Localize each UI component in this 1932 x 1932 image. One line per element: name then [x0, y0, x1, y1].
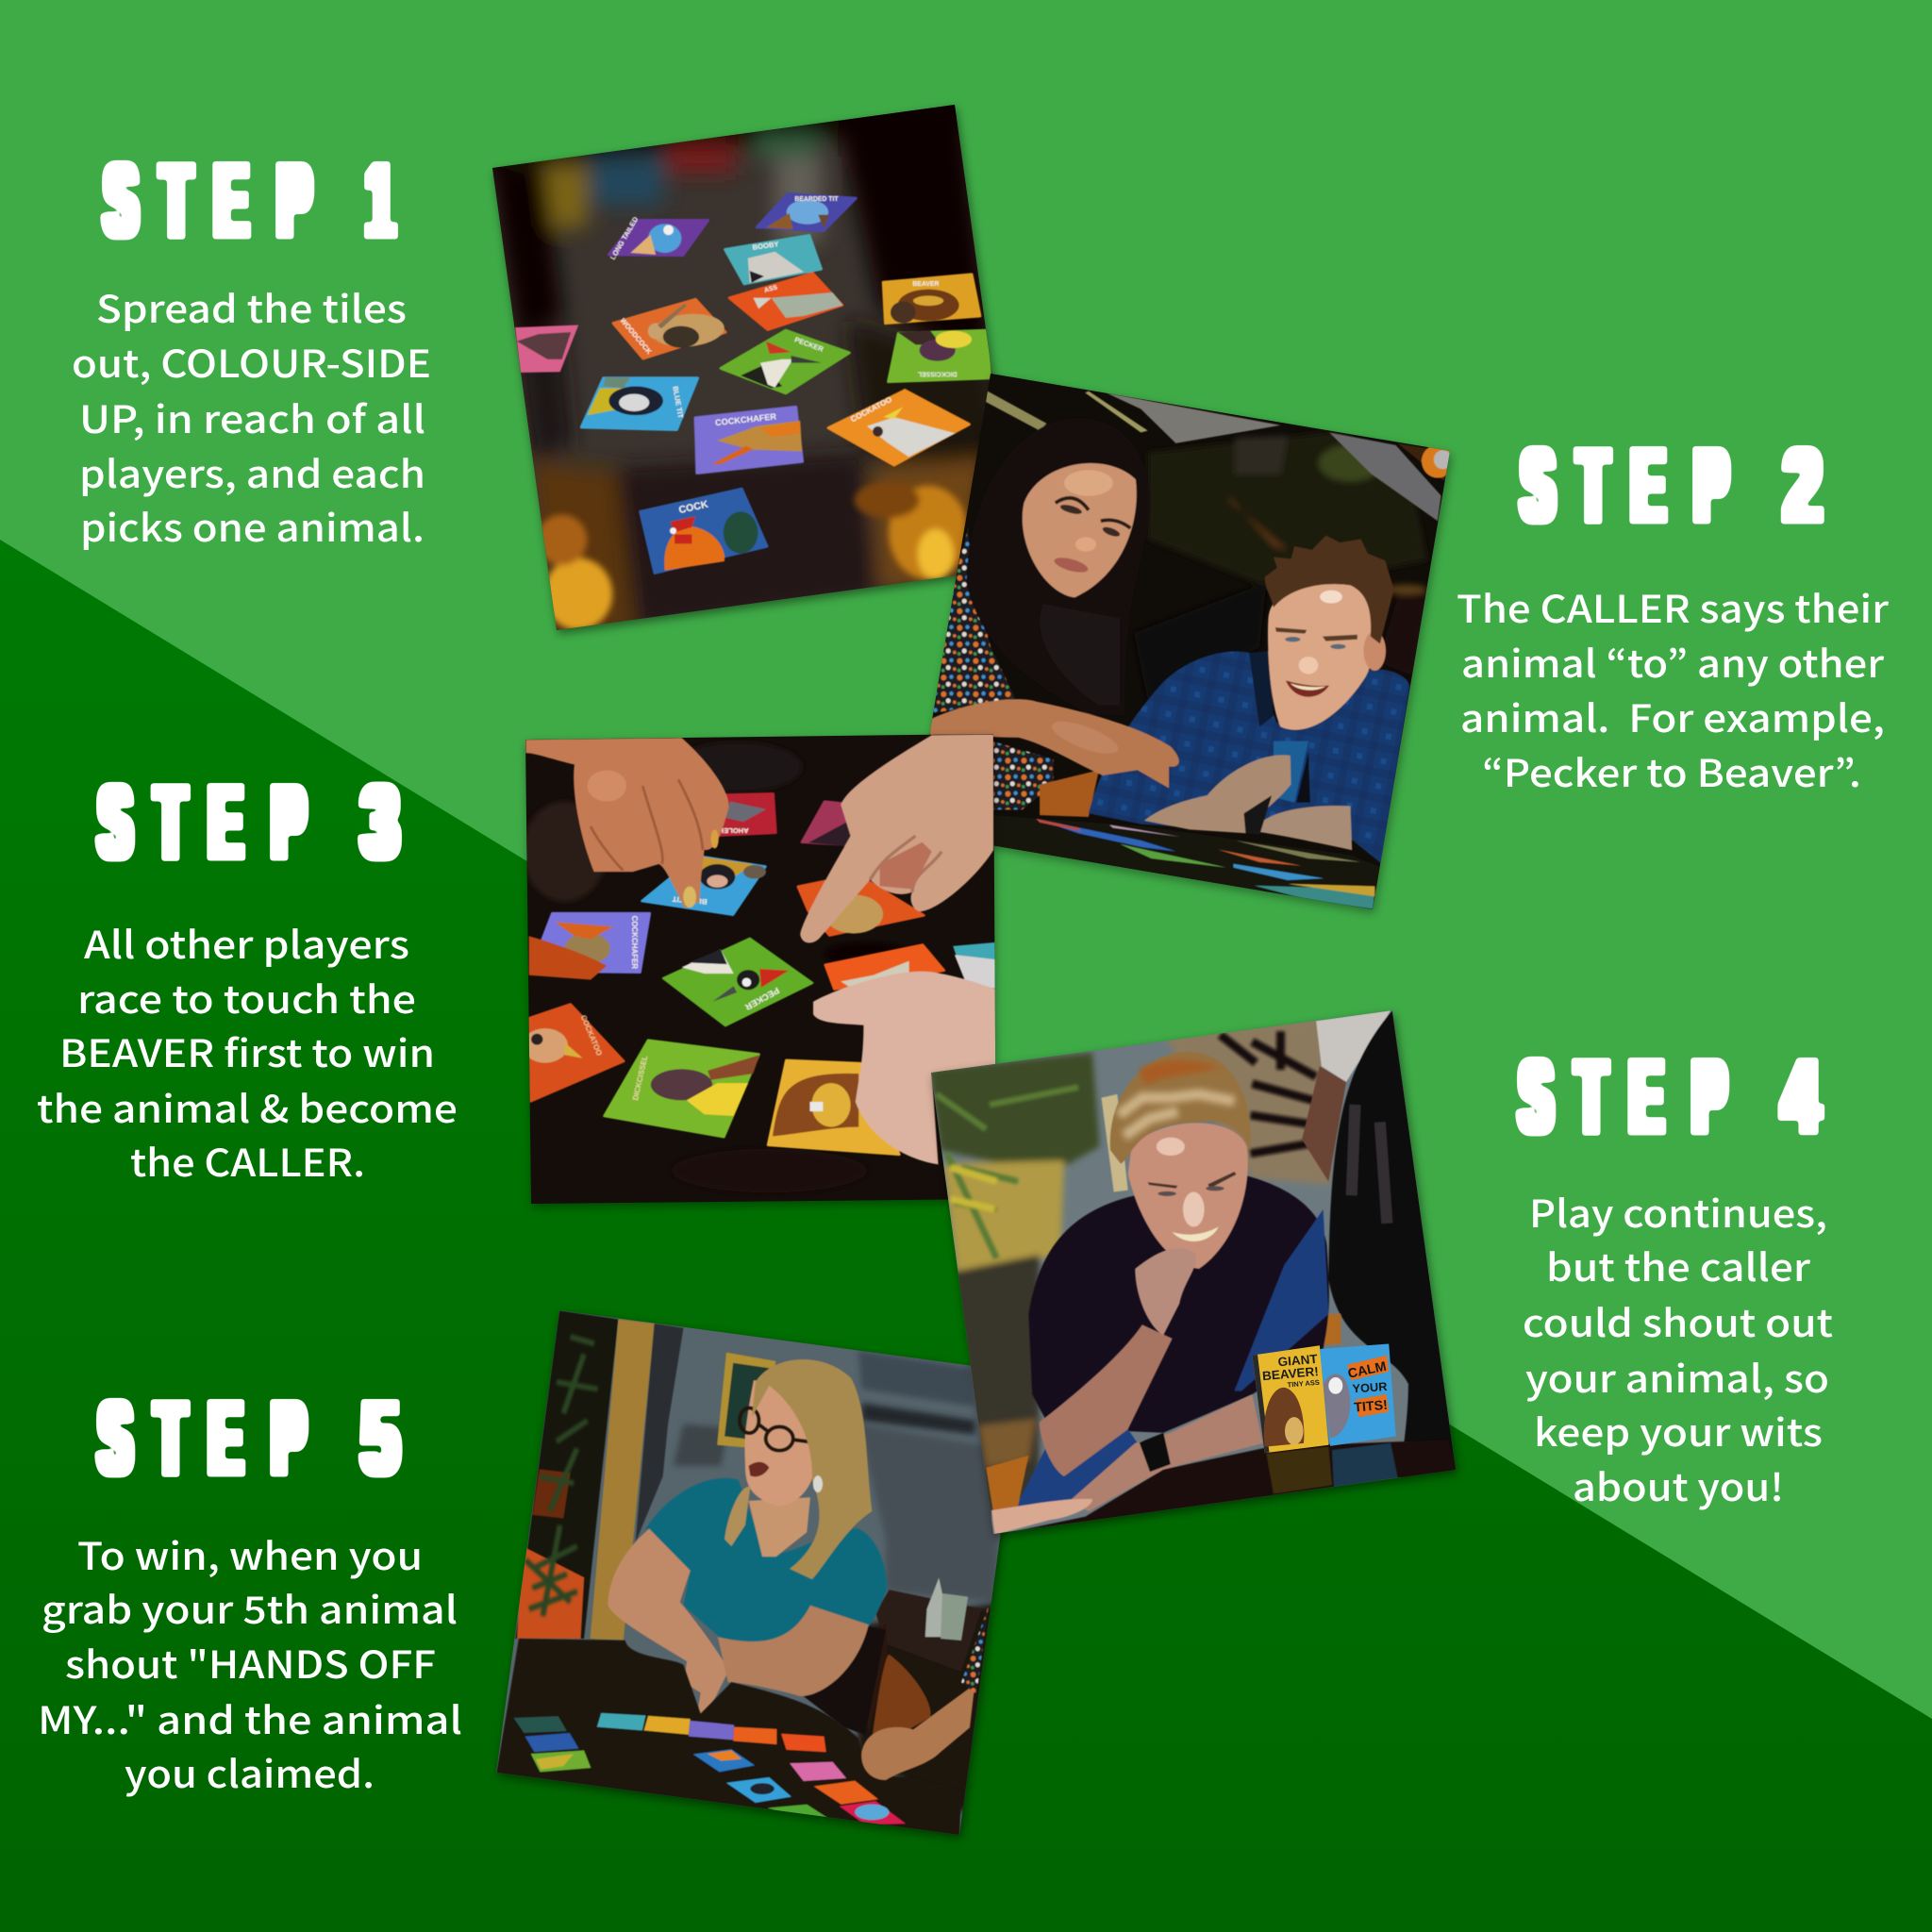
tile: dickcissel [889, 330, 991, 382]
tile: woodcock [613, 299, 725, 358]
photo: step 1 tiles spread on table [490, 104, 999, 639]
tile: red: AHOLEH [719, 826, 749, 835]
table with edge-on tiles [992, 815, 1382, 911]
man: face [1128, 1123, 1248, 1269]
step 2 text: animal “to” any other [1461, 634, 1885, 689]
game box: Calm Your Tits: TITS! [1354, 1398, 1389, 1416]
step 3 heading [99, 763, 399, 880]
game box: Giant Beaver Tiny Ass: TINY ASS [1287, 1378, 1320, 1390]
man: raised arm and fist [1040, 1248, 1196, 1476]
step 4 text [1523, 1184, 1833, 1512]
photo: step 3 hands racing to touch tiles [509, 726, 1029, 1227]
step 5 heading: STEP [99, 1380, 305, 1496]
tile: bearded tit [757, 194, 856, 231]
tile: pecker: PECKER [742, 985, 781, 1012]
step 5 text: shout "HANDS OFF [65, 1635, 436, 1690]
step 5 text: you claimed. [125, 1744, 375, 1799]
step 4 text: about you! [1573, 1457, 1784, 1512]
tile: cockchafer [530, 913, 650, 973]
tile: long tailed tit [608, 215, 708, 261]
tile: cock [641, 489, 767, 573]
step 1 text: out, COLOUR-SIDE [72, 334, 431, 389]
step 2 text: animal. For example, [1460, 689, 1885, 743]
tile: pecker: PECKER [793, 335, 824, 354]
step 1 text: UP, in reach of all [79, 390, 425, 444]
woman: arm and hand [930, 699, 1179, 788]
woman: face [744, 1380, 814, 1507]
tile: woodcock [798, 879, 924, 936]
tile: dickcissel [605, 1041, 759, 1137]
step 3 text: BEAVER first to win [59, 1024, 435, 1078]
tile: blue tit: BLUE TIT [672, 894, 708, 906]
woman: glasses [740, 1407, 812, 1451]
hand at bottom [991, 1499, 1092, 1535]
step 1 text [72, 279, 431, 553]
table with tiles [496, 1606, 989, 1836]
hand: left pointing with gold nail [525, 738, 729, 980]
hand: right pointing [800, 734, 993, 943]
tile: pink rump [515, 325, 578, 373]
man: face [1268, 584, 1386, 730]
man: hands and forearm [1144, 755, 1291, 833]
tile: beaver [768, 1060, 899, 1155]
tile: dickcissel: DICKCISSEL [631, 1055, 649, 1101]
woman: neck [749, 1497, 810, 1557]
other player: arm and floral sleeve [861, 1606, 989, 1780]
plant foliage [525, 1337, 598, 1616]
tile: cockchafer: COCKCHAFER [630, 916, 639, 969]
tile: bearded tit: BEARDED TIT [794, 196, 839, 203]
step 5 text: MY..." and the animal [38, 1690, 462, 1745]
game box: Giant Beaver Tiny Ass: BEAVER! [1261, 1364, 1319, 1383]
woman: left arm [608, 1528, 728, 1714]
game box: Calm Your Tits [1320, 1343, 1396, 1446]
step 4 heading: STEP [1520, 1039, 1725, 1155]
step 5 heading [99, 1379, 399, 1496]
step 4 text: keep your wits [1534, 1403, 1823, 1457]
tile: red [682, 793, 775, 837]
step 1 heading: 1 [367, 142, 393, 258]
man: black t-shirt [1028, 1174, 1329, 1433]
woman: right arm [718, 1606, 869, 1696]
step 5 text: To win, when you [77, 1526, 423, 1581]
tile: woodcock: WOODCOCK [619, 316, 654, 357]
tile: cockatoo [523, 1005, 624, 1101]
step 4 text: Play continues, [1529, 1184, 1827, 1239]
game box: Giant Beaver Tiny Ass: GIANT [1277, 1352, 1318, 1369]
photo: step 2 woman and man at table [927, 374, 1456, 917]
game box: Calm Your Tits: YOUR [1352, 1380, 1388, 1395]
game box: Calm Your Tits: CALM [1346, 1359, 1388, 1382]
step 4 heading: 4 [1782, 1038, 1820, 1155]
tile: long tailed tit: LONG TAILED [608, 215, 641, 261]
step 2 text [1457, 579, 1890, 798]
step 3 text: the CALLER. [130, 1133, 365, 1188]
woman: floral dress [930, 528, 1054, 809]
tile: dickcissel: DICKCISSEL [918, 371, 958, 377]
game box: Giant Beaver Tiny Ass [1252, 1345, 1328, 1453]
tile: cockchafer: COCKCHAFER [715, 411, 777, 427]
tile: beaver [883, 275, 980, 324]
man: hair highlights [1119, 1060, 1235, 1136]
step 3 heading: STEP [99, 764, 305, 880]
tile: cockatoo [828, 391, 969, 465]
step 3 text: All other players [84, 915, 409, 970]
woman: face [1023, 463, 1137, 597]
tile: blue tit [581, 377, 698, 429]
tile: booby: BOOBY [752, 240, 779, 252]
woman: torso below arm [804, 1626, 886, 1735]
man: blue lower sleeve [1014, 1429, 1142, 1509]
tile: ass [729, 274, 842, 329]
step 2 heading: 2 [1784, 426, 1822, 543]
step 1 text: picks one animal. [80, 498, 425, 553]
man: hair [1110, 1052, 1251, 1164]
side table and glassware [875, 1577, 982, 1672]
tile: rump [802, 802, 854, 847]
step 5 text [38, 1526, 462, 1799]
step 4 text: but the caller [1546, 1238, 1811, 1292]
man: hair [1265, 536, 1394, 643]
tile: ass: ASS [764, 284, 778, 294]
tile: pecker [663, 939, 812, 1025]
photo: step 4 man laughing with game boxes [915, 1000, 1483, 1558]
step 1 heading: STEP [105, 142, 310, 258]
step 3 heading: 3 [361, 763, 399, 880]
background: dark green diagonal band [0, 540, 1932, 1932]
step 2 heading: STEP [1522, 427, 1727, 543]
step 4 text: could shout out [1523, 1293, 1833, 1348]
step 3 text: race to touch the [77, 970, 416, 1024]
tile: ass [825, 945, 944, 990]
hand: lower right reaching [813, 972, 997, 1164]
step 4 text: your animal, so [1525, 1349, 1829, 1404]
table [994, 1440, 1458, 1536]
tile: cockchafer [695, 407, 803, 473]
step 5 text: grab your 5th animal [42, 1580, 458, 1635]
chair [858, 1623, 931, 1738]
tile: booby [725, 236, 821, 284]
second player's dark hair [1328, 1010, 1458, 1489]
tile: blue tit: BLUE TIT [671, 386, 685, 419]
man: forearm and watch [1068, 1394, 1263, 1511]
tile: booby [953, 942, 996, 989]
woman: hair [752, 1359, 872, 1579]
tile: beaver: BEAVER [912, 281, 940, 288]
step 5 heading: 5 [361, 1379, 399, 1496]
step 1 text: Spread the tiles [96, 279, 407, 334]
step 1 text: players, and each [79, 444, 425, 499]
framed picture [717, 1353, 776, 1448]
step 3 text [37, 915, 458, 1188]
photo: step 5 woman pointing at tiles [481, 1302, 1030, 1860]
step 2 heading [1522, 426, 1822, 543]
step 3 text: the animal & become [37, 1079, 458, 1134]
tile: cockatoo: COCKATOO [849, 394, 893, 424]
tile: pecker [721, 330, 849, 393]
step 2 text: The CALLER says their [1457, 579, 1890, 634]
tile: blue tit [642, 856, 766, 915]
tile: cock: COCK [677, 499, 709, 516]
tile: cockatoo: COCKATOO [579, 1014, 604, 1057]
woman: shirt [645, 1478, 887, 1645]
woman: hair [966, 418, 1149, 716]
step 4 heading [1520, 1038, 1820, 1155]
man: shirt [1089, 651, 1409, 864]
step 2 text: “Pecker to Beaver”. [1482, 743, 1861, 798]
